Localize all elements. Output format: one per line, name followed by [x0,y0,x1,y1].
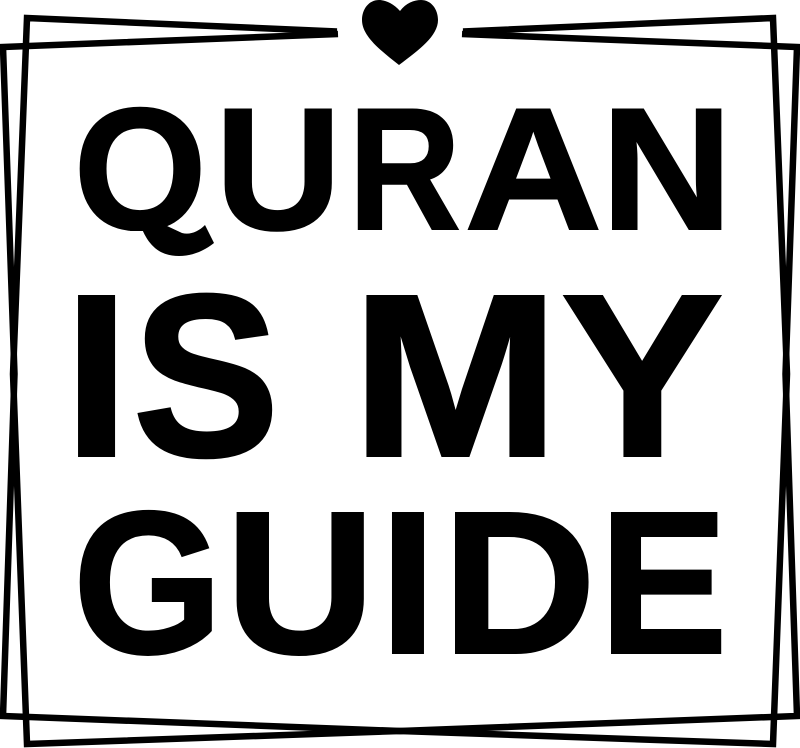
heading line: IS MY: M [351,247,560,506]
heading line: GUIDE: G [73,469,223,696]
heading line: GUIDE: U [225,470,375,696]
heading line: QURAN: U [215,72,341,266]
heading line: QURAN: Q [74,72,207,266]
heading line: GUIDE: I [380,470,436,697]
heading line: GUIDE [73,469,728,697]
heading line: IS MY: Y [561,247,723,505]
heading line: IS MY: I [64,246,130,505]
heading line: QURAN: R [348,72,461,266]
heading line: GUIDE: D [442,470,596,697]
heading line: IS MY [64,246,723,506]
heading line: QURAN [74,72,733,271]
heading line: GUIDE: E [599,469,728,696]
icon: heart [362,0,438,65]
heading line: QURAN: N [601,72,733,266]
heading line: QURAN: A [464,72,602,266]
heading line: IS MY: S [133,247,279,505]
